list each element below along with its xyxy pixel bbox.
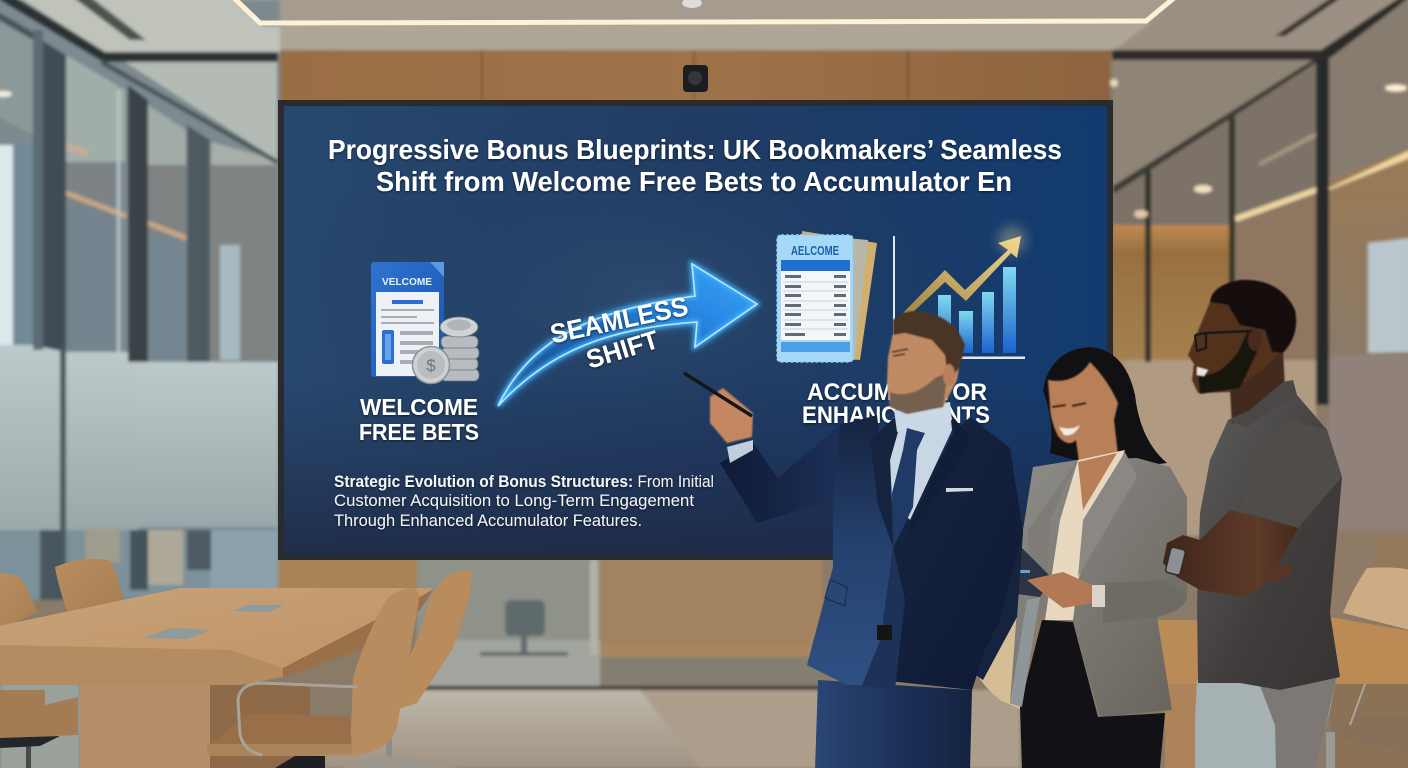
trousers — [1195, 675, 1337, 768]
wood wall panel — [278, 50, 1112, 691]
collar — [894, 402, 952, 433]
sleeve — [1240, 420, 1342, 528]
shirt cuff — [727, 440, 753, 463]
lapels — [1028, 460, 1078, 617]
label: welcome free bets — [359, 394, 479, 445]
chair front — [350, 588, 419, 757]
jacket right — [880, 417, 1023, 690]
arrow: seamless shift — [498, 264, 757, 406]
floor — [300, 690, 1020, 768]
left glass wall — [0, 0, 280, 600]
table top — [0, 588, 433, 668]
label: accumulator enhancements: ENHANCEMENTS — [802, 402, 990, 429]
collar — [1228, 380, 1297, 427]
icon: pointer pen — [684, 373, 752, 416]
blazer strip — [1010, 597, 1040, 707]
person: woman with tablet — [940, 347, 1187, 768]
ceiling — [0, 0, 1408, 60]
face — [1048, 362, 1118, 470]
label: accumulator enhancements: ACCUMULATOR — [807, 379, 987, 406]
trousers — [815, 680, 972, 768]
icon: coin stack: $ — [426, 356, 436, 375]
belt — [877, 625, 892, 640]
person: presenter in navy suit — [684, 311, 1023, 768]
label: accumulator enhancements — [802, 379, 990, 429]
table and chairs left — [0, 559, 472, 768]
person: man with glasses and grey polo — [1163, 280, 1342, 768]
icon: welcome free bet document with coins — [371, 262, 479, 384]
title — [328, 134, 1062, 197]
far arm — [973, 448, 1023, 680]
blazer — [1010, 458, 1187, 717]
chair far — [55, 559, 123, 615]
right glass wall — [1110, 0, 1408, 768]
hand — [1027, 572, 1097, 608]
chart: rising bars with gold arrow — [893, 226, 1026, 359]
chair second — [390, 570, 472, 712]
neck and head — [1188, 280, 1296, 424]
pointing hand — [710, 388, 753, 443]
jacket left — [807, 415, 893, 685]
glasses — [1195, 331, 1252, 351]
panel: presentation screen — [278, 100, 1113, 560]
label: welcome free bets: FREE BETS — [359, 419, 479, 445]
title: Shift from Welcome Free Bets to Accumulator En — [376, 166, 1012, 197]
pocket flap — [825, 580, 847, 606]
tablet — [940, 542, 1052, 597]
lapels — [870, 415, 898, 547]
icon: accumulator tickets: AELCOME — [791, 244, 839, 258]
trousers — [1020, 620, 1165, 768]
sleeve — [1103, 580, 1187, 623]
polo shirt — [1197, 395, 1342, 690]
blouse — [1045, 450, 1125, 620]
table and chairs right — [973, 567, 1408, 768]
shirt — [890, 410, 952, 520]
pointing sleeve — [720, 425, 840, 523]
camera — [683, 65, 708, 92]
icon: accumulator tickets — [777, 231, 877, 362]
arrow: seamless shift: SHIFT — [583, 324, 662, 375]
text block: strategic evolution caption — [334, 473, 714, 530]
title: Progressive Bonus Blueprints: UK Bookmakers’ Seamless — [328, 134, 1062, 165]
arrow: seamless shift: SEAMLESS — [548, 291, 691, 349]
wristwatch — [1165, 547, 1186, 576]
hair — [1043, 347, 1167, 470]
text block: strategic evolution caption: Through Enhanced Accumulator Features. — [334, 512, 642, 530]
text block: strategic evolution caption: Customer Acquisition to Long-Term Engagement — [334, 492, 694, 510]
label: welcome free bets: WELCOME — [360, 394, 478, 420]
tie — [892, 428, 925, 548]
text block: strategic evolution caption: Strategic Evolution of Bonus Structures: From Initial — [334, 473, 714, 491]
crossed arms — [1163, 510, 1298, 597]
head — [887, 311, 965, 414]
ceiling light — [234, 0, 1174, 23]
icon: welcome free bet document with coins: VELCOME — [382, 276, 432, 288]
pocket square — [946, 488, 973, 492]
